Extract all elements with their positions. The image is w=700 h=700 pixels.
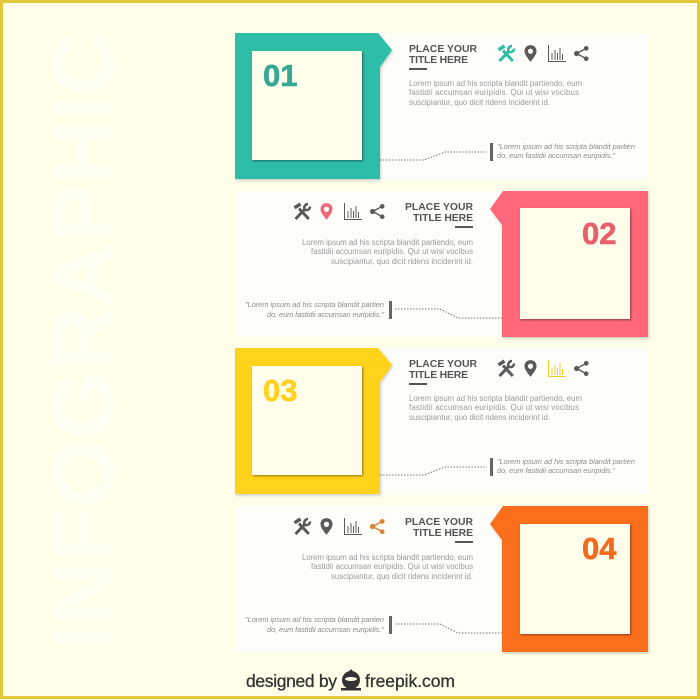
quote: do, eum fastidii accumsan euripidis." xyxy=(497,151,615,160)
heading: PLACE YOUR xyxy=(405,517,473,528)
heading xyxy=(405,202,473,228)
heading xyxy=(409,359,477,385)
quote: "Lorem ipsum ad his scripta blandit partien xyxy=(497,142,635,151)
quote: "Lorem ipsum ad his scripta blandit partien xyxy=(497,457,635,466)
body text: fastidii accumsan euripidis. Qui ut wisi vocibus xyxy=(409,403,579,412)
heading: TITLE HERE xyxy=(413,528,473,539)
body text: fastidii accumsan euripidis. Qui ut wisi vocibus xyxy=(311,247,473,256)
icon row xyxy=(294,518,385,535)
body text: suscipiantur, quo dicit ridens inciderint id. xyxy=(331,257,473,266)
quote: "Lorem ipsum ad his scripta blandit partien xyxy=(245,615,384,624)
quote xyxy=(245,615,392,634)
icon: freepik logo xyxy=(341,670,361,690)
body text: fastidii accumsan euripidis. Qui ut wisi vocibus xyxy=(409,88,579,97)
heading: PLACE YOUR xyxy=(409,44,477,55)
body text: suscipiantur, quo dicit ridens inciderint id. xyxy=(331,572,473,581)
body text: suscipiantur, quo dicit ridens inciderint id. xyxy=(409,413,550,422)
connector xyxy=(395,309,502,318)
teal frame xyxy=(235,33,392,179)
body text: suscipiantur, quo dicit ridens inciderint id. xyxy=(409,98,550,107)
body text: Lorem ipsum ad his scripta blandit partiendo, eum xyxy=(409,394,582,403)
connector xyxy=(380,152,487,160)
icon row xyxy=(294,203,385,220)
body text xyxy=(302,238,473,266)
panel: step 01 xyxy=(235,33,647,180)
connector xyxy=(395,624,502,633)
icon row xyxy=(498,45,589,62)
body text: Lorem ipsum ad his scripta blandit partiendo, eum xyxy=(302,238,473,247)
heading: TITLE HERE xyxy=(409,55,468,66)
image placeholder xyxy=(252,51,362,160)
heading xyxy=(405,517,473,543)
quote: do, eum fastidii accumsan euripidis." xyxy=(267,625,384,634)
quote xyxy=(490,142,635,161)
orange frame xyxy=(490,506,648,652)
icon row xyxy=(498,360,589,377)
heading: PLACE YOUR xyxy=(409,359,477,370)
heading: PLACE YOUR xyxy=(405,202,473,213)
pink frame xyxy=(490,191,648,337)
body text xyxy=(409,394,582,422)
body text xyxy=(409,79,582,107)
heading xyxy=(409,44,477,70)
body text: Lorem ipsum ad his scripta blandit partiendo, eum xyxy=(409,79,582,88)
quote xyxy=(245,300,392,319)
footer credit: freepik.com xyxy=(365,671,455,691)
image placeholder xyxy=(520,208,630,319)
number 03: 03 xyxy=(263,373,297,408)
heading: TITLE HERE xyxy=(413,213,473,224)
quote: "Lorem ipsum ad his scripta blandit partien xyxy=(245,300,384,309)
quote: do, eum fastidii accumsan euripidis." xyxy=(267,310,384,319)
vertical watermark title: INFOGRAPHIC xyxy=(36,32,130,650)
number 01: 01 xyxy=(263,58,297,93)
faint watermark caption: designed by freepik.com infographic xyxy=(40,649,200,658)
image placeholder xyxy=(252,366,362,475)
panel: step 03 xyxy=(235,348,647,495)
panel: step 04 xyxy=(235,506,648,652)
body text: fastidii accumsan euripidis. Qui ut wisi vocibus xyxy=(311,562,473,571)
panel: step 02 xyxy=(235,191,648,337)
connector xyxy=(380,467,487,475)
image placeholder xyxy=(520,524,630,634)
footer credit xyxy=(246,670,455,691)
footer credit: designed by xyxy=(246,671,337,691)
quote xyxy=(490,457,635,476)
number 02: 02 xyxy=(582,216,616,251)
yellow frame xyxy=(235,348,392,494)
body text: Lorem ipsum ad his scripta blandit partiendo, eum xyxy=(302,553,473,562)
heading: TITLE HERE xyxy=(409,370,468,381)
number 04: 04 xyxy=(582,531,617,566)
body text xyxy=(302,553,473,581)
quote: do, eum fastidii accumsan euripidis." xyxy=(497,466,615,475)
